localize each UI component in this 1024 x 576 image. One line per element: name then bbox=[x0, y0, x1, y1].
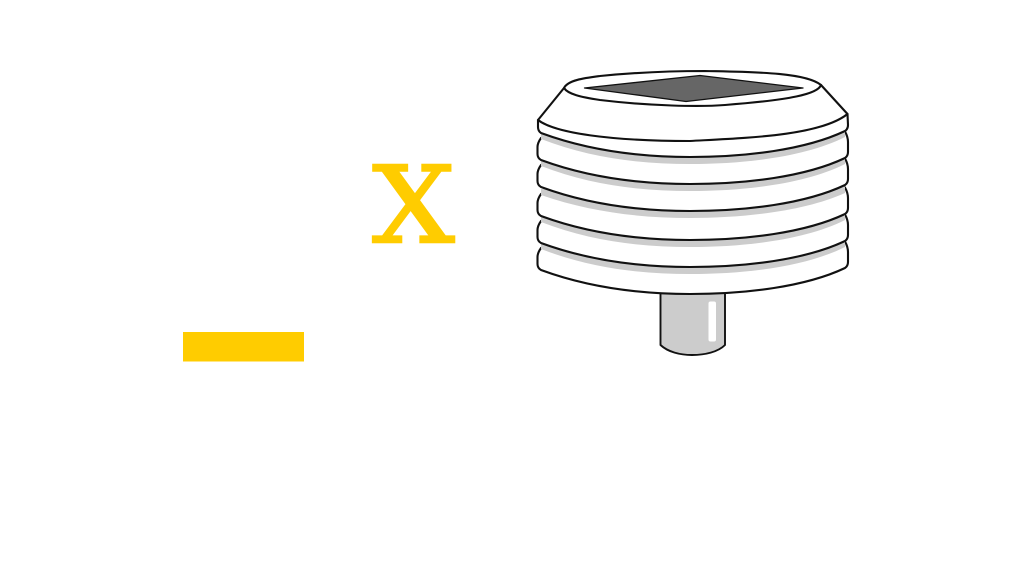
yellow X letter: X bbox=[372, 144, 455, 268]
sensor mounting pole bbox=[660, 290, 725, 355]
sensor top ring bbox=[564, 71, 821, 106]
shield plate 6 bbox=[538, 241, 848, 294]
yellow bar bbox=[183, 332, 304, 362]
shield plate 5 bbox=[538, 214, 848, 267]
shield plate 3 bbox=[538, 158, 848, 211]
dark solar panel bbox=[584, 76, 803, 102]
shield plate 4 bbox=[538, 187, 848, 240]
shield plate 2 bbox=[538, 131, 848, 184]
icon: radiation shield sensor bbox=[538, 71, 848, 355]
top shield plate and dome bbox=[538, 85, 848, 157]
